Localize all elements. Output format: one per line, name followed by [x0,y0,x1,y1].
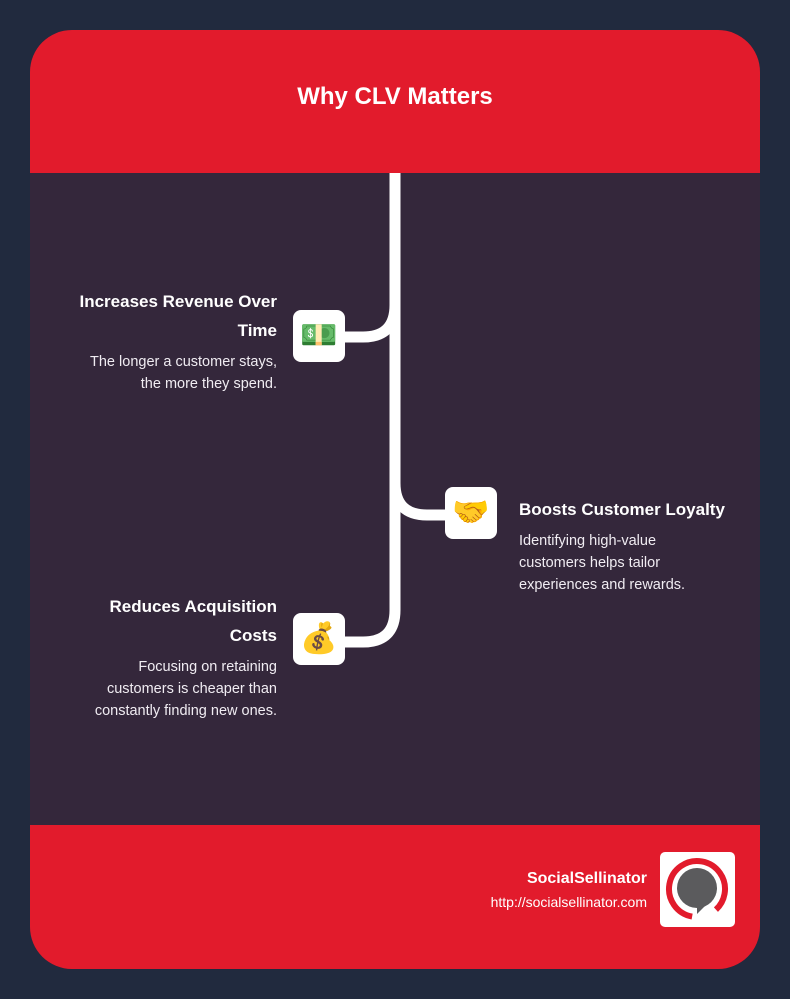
item: increases revenue: Time [238,321,277,340]
item: reduces acquisition: Focusing on retaining [138,659,277,675]
item: boosts loyalty [519,500,725,593]
item: reduces acquisition: customers is cheaper than [107,681,277,697]
icon: money bag [293,613,345,665]
icon: handshake [445,487,497,539]
title: Why CLV Matters [297,83,493,110]
item: boosts loyalty: Boosts Customer Loyalty [519,500,725,519]
icon: money: 💵 [300,318,338,353]
item: boosts loyalty: experiences and rewards. [519,577,685,593]
footer brand text [491,870,647,910]
item: reduces acquisition: Reduces Acquisition [109,597,277,616]
item: increases revenue: The longer a customer stays, [90,354,277,370]
item: increases revenue: Increases Revenue Over [79,292,277,311]
icon: money [293,310,345,362]
footer brand text: SocialSellinator [527,870,647,887]
logo [660,852,735,927]
item: reduces acquisition: constantly finding new ones. [95,703,277,719]
header band [30,30,760,173]
item: increases revenue [79,292,277,392]
footer brand text: http://socialsellinator.com [491,894,647,910]
icon: handshake: 🤝 [452,495,490,530]
footer band [30,825,760,969]
item: boosts loyalty: Identifying high-value [519,533,656,549]
item: reduces acquisition: Costs [230,626,277,645]
item: boosts loyalty: customers helps tailor [519,555,660,571]
item: increases revenue: the more they spend. [141,376,277,392]
item: reduces acquisition [95,597,277,719]
icon: money bag: 💰 [300,621,338,656]
